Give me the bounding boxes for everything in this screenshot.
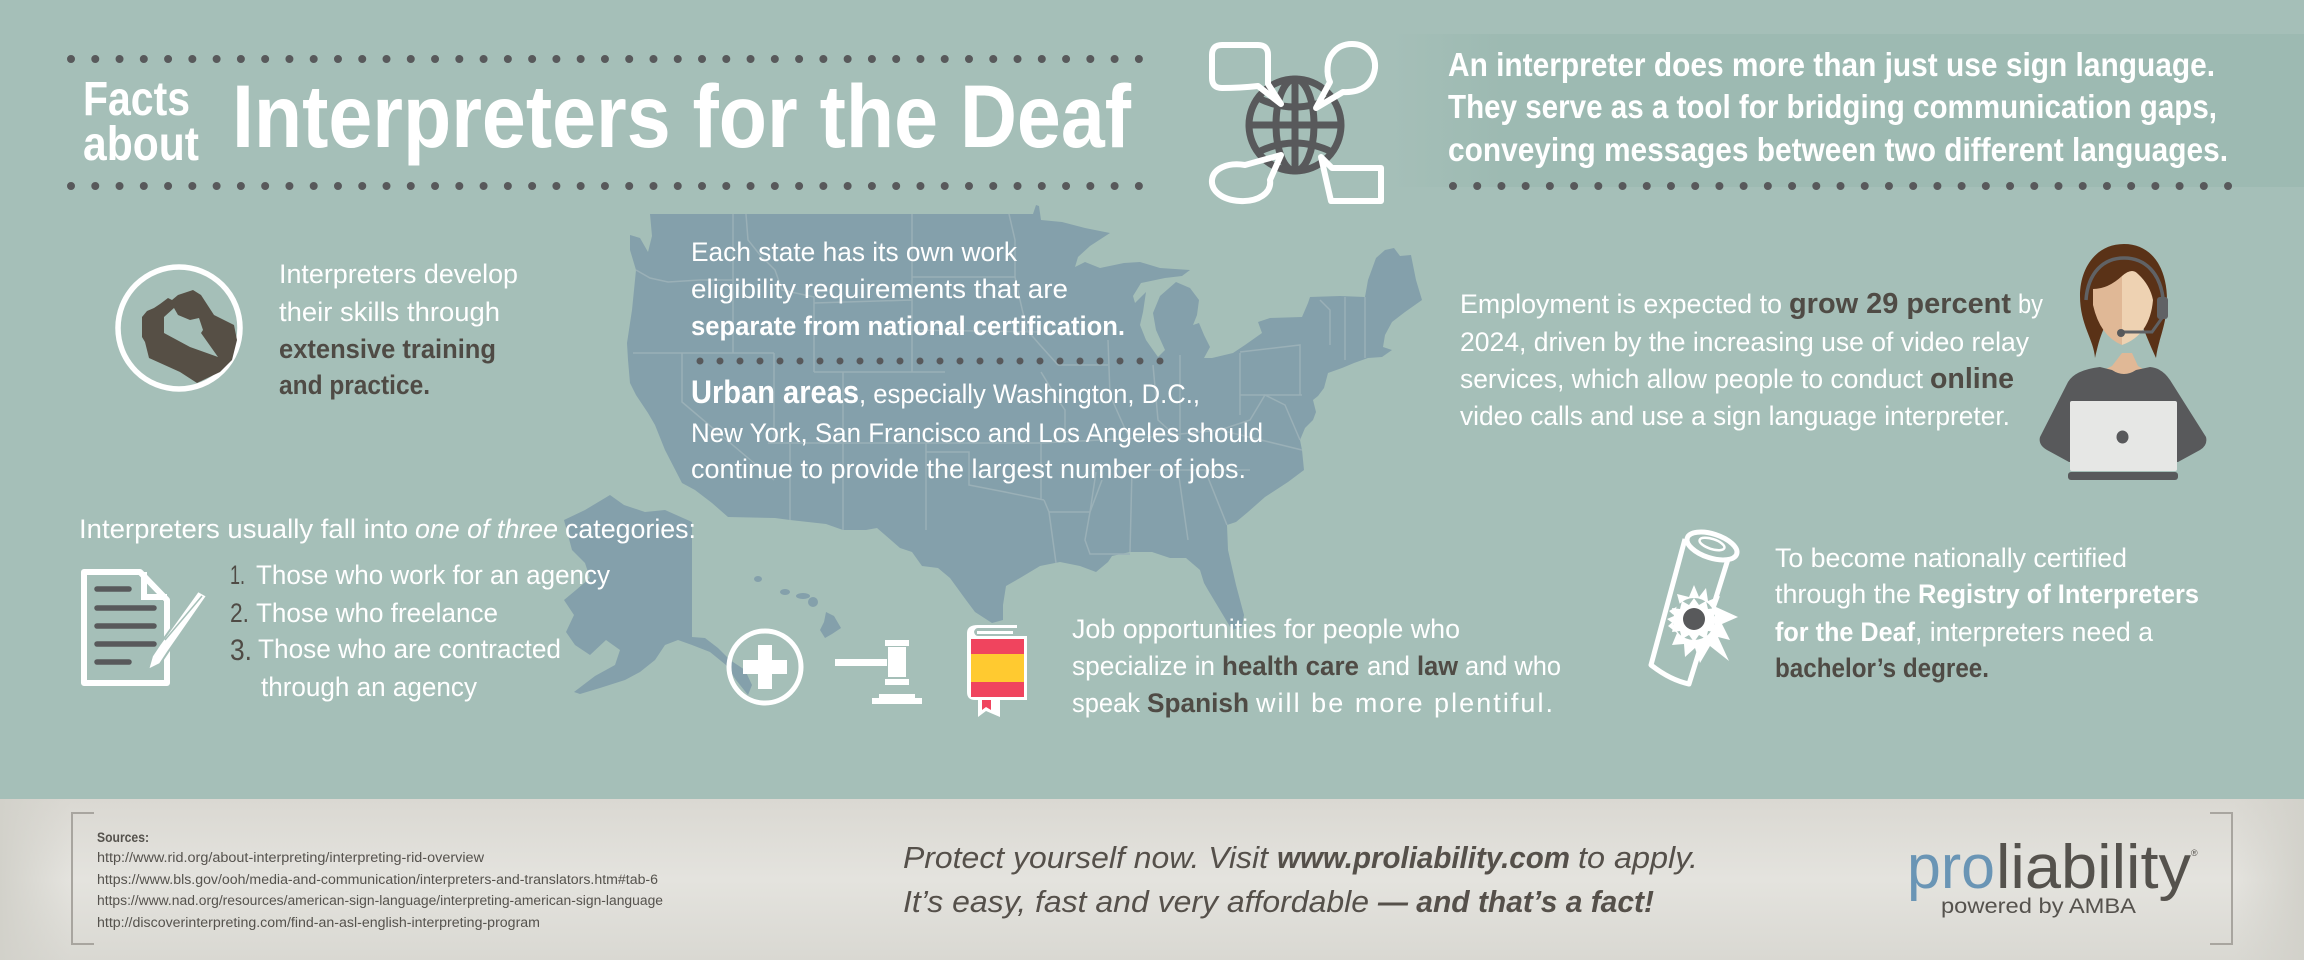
icon: signing hands (118, 267, 240, 389)
text: job opportunities: specialize in (1072, 651, 1215, 681)
text: employment growth: services, which allow people to conduct (1460, 364, 1923, 394)
text: urban areas: , especially Washington, D.C., (859, 379, 1200, 409)
text: job opportunities: and (1367, 651, 1410, 681)
state borders (633, 214, 1365, 563)
intro text (1448, 46, 2228, 168)
text: urban areas: continue to provide the largest number of jobs. (691, 454, 1246, 484)
footer panel (0, 799, 2304, 960)
call to action: www.proliability.com (1277, 840, 1570, 875)
title: Interpreters for the Deaf (232, 66, 1131, 166)
list: three categories: 2. (230, 598, 249, 628)
list: three categories: through an agency (261, 672, 477, 702)
text: training: extensive training (279, 334, 496, 364)
call to action: It’s easy, fast and very affordable (903, 884, 1369, 919)
list: three categories: Those who freelance (256, 598, 498, 628)
text: categories heading: categories: (565, 514, 696, 544)
list: three categories: Those who are contracted (258, 634, 561, 664)
text: training: Interpreters develop (279, 259, 518, 289)
text: national certification: bachelor’s degree. (1775, 653, 1989, 683)
text: urban areas: New York, San Francisco and Los Angeles should (691, 418, 1263, 448)
left bracket (72, 813, 94, 944)
list: three categories: Those who work for an agency (256, 560, 610, 590)
icon: gavel (835, 640, 922, 704)
list: three categories: 3. (230, 634, 252, 667)
text: national certification: through the (1775, 579, 1911, 609)
text: state requirements: eligibility requirements that are (691, 274, 1068, 304)
logo: proliability: powered by AMBA (1941, 895, 2136, 918)
text: national certification: Registry of Interpreters (1918, 579, 2199, 609)
text: categories heading: Interpreters usually fall into (79, 514, 408, 544)
intro dotted rule (1453, 182, 2230, 190)
text: training (279, 259, 518, 400)
text: employment growth: grow 29 percent (1789, 288, 2011, 320)
right bracket (2210, 813, 2232, 944)
call to action (903, 840, 1698, 919)
text: state requirements: Each state has its own work (691, 237, 1017, 267)
icon: interpreter with laptop (2040, 244, 2206, 480)
call to action: Protect yourself now. Visit (903, 840, 1269, 875)
icon: document and pen (84, 572, 207, 683)
title: Facts (83, 73, 190, 126)
intro text: They serve as a tool for bridging communication gaps, (1448, 88, 2217, 125)
call to action: — and that’s a fact! (1377, 884, 1654, 919)
sources: http://www.rid.org/about-interpreting/interpreting-rid-overview (97, 850, 484, 865)
top dotted rule (71, 55, 1142, 63)
text: employment growth: Employment is expected to (1460, 289, 1782, 319)
text: job opportunities: law (1417, 651, 1459, 681)
bottom dotted rule (71, 182, 1142, 190)
logo: proliability: liability (1996, 833, 2191, 902)
list: three categories (230, 560, 610, 702)
sources (97, 830, 663, 930)
text: employment growth: online (1930, 363, 2014, 395)
text: urban areas (691, 374, 1263, 484)
text: training: and practice. (279, 370, 430, 400)
sources: https://www.nad.org/resources/american-sign-language/interpreting-american-sign-language (97, 893, 663, 908)
icon: medical cross (729, 631, 801, 703)
logo: proliability: ® (2191, 848, 2198, 858)
text: job opportunities: Spanish (1147, 688, 1249, 718)
text: job opportunities: and who (1465, 651, 1561, 681)
sources: http://discoverinterpreting.com/find-an-asl-english-interpreting-program (97, 915, 540, 930)
text: employment growth (1460, 288, 2043, 431)
icon: globe with speech bubbles (1212, 44, 1381, 201)
map of the United States (564, 205, 1422, 695)
intro text: conveying messages between two different languages. (1448, 131, 2228, 168)
text: employment growth: 2024, driven by the increasing use of video relay (1460, 327, 2029, 357)
hawaii (754, 576, 841, 638)
text: national certification (1775, 543, 2199, 683)
text: national certification: To become nationally certified (1775, 543, 2127, 573)
text: job opportunities: will be more plentiful. (1255, 688, 1553, 718)
text: categories heading (79, 514, 696, 544)
text: employment growth: by (2018, 289, 2043, 319)
text: job opportunities: speak (1072, 688, 1140, 718)
map dotted rule (700, 358, 1162, 364)
icon: diploma (1651, 527, 1740, 684)
intro text: An interpreter does more than just use sign language. (1448, 46, 2215, 83)
text: state requirements: separate from national certification. (691, 311, 1125, 341)
text: national certification: , interpreters need a (1915, 617, 2154, 647)
intro band (1393, 34, 2304, 187)
text: national certification: for the Deaf (1775, 617, 1916, 647)
logo: proliability: pro (1907, 833, 1995, 902)
text: job opportunities: Job opportunities for people who (1072, 614, 1460, 644)
sources: Sources: (97, 830, 149, 845)
logo: proliability (1907, 833, 2198, 918)
sources: https://www.bls.gov/ooh/media-and-communication/interpreters-and-translators.htm#tab-6 (97, 872, 658, 887)
text: training: their skills through (279, 297, 500, 327)
text: job opportunities (1072, 614, 1561, 718)
call to action: to apply. (1578, 840, 1698, 875)
title: about (83, 118, 199, 171)
text: job opportunities: health care (1222, 651, 1359, 681)
icon: Spanish book (967, 625, 1027, 717)
alaska (564, 495, 752, 695)
list: three categories: 1. (230, 560, 245, 590)
text: state requirements (691, 237, 1125, 341)
text: employment growth: video calls and use a sign language interpreter. (1460, 401, 2010, 431)
text: urban areas: Urban areas (691, 374, 859, 410)
text: categories heading: one of three (415, 514, 558, 544)
